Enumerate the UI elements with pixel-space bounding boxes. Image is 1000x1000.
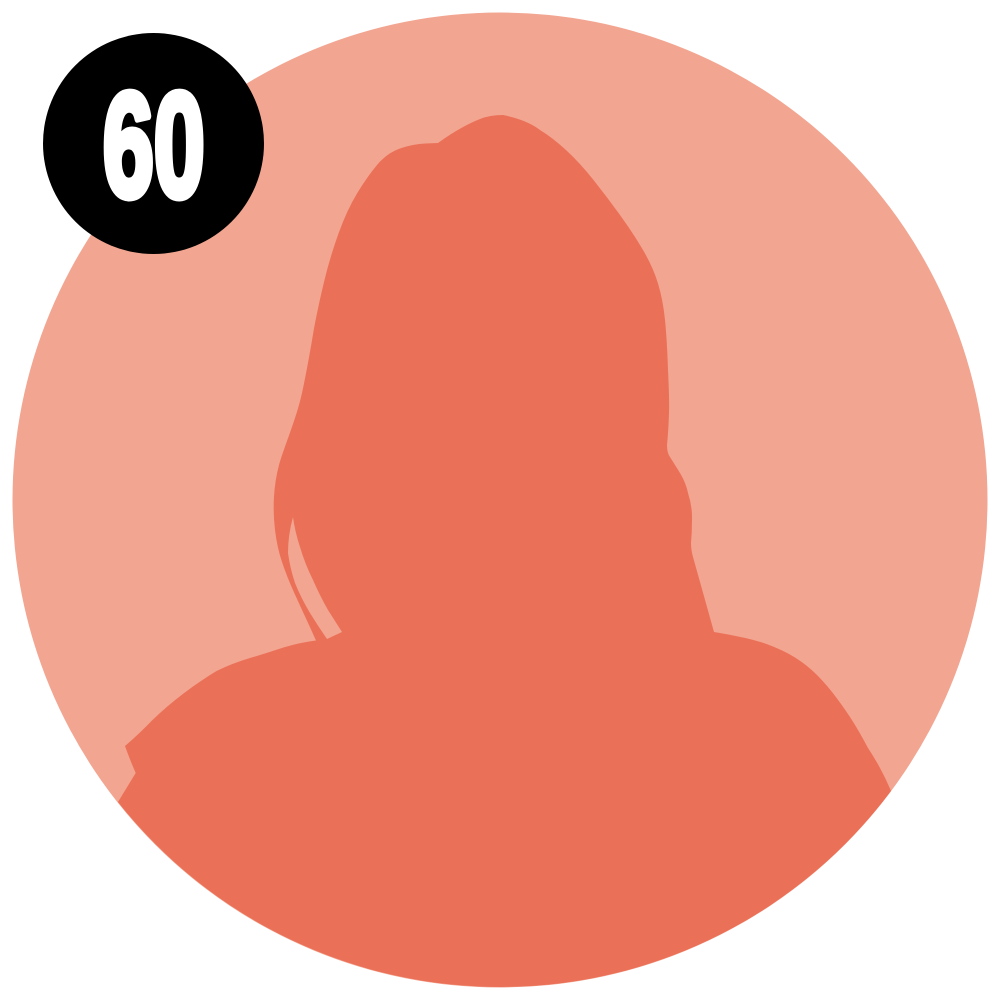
age badge: [43, 33, 264, 254]
silhouette of woman: [118, 115, 891, 987]
badge number: 60: [103, 63, 205, 228]
hair highlight: [288, 517, 342, 639]
badge circle: [43, 33, 264, 254]
